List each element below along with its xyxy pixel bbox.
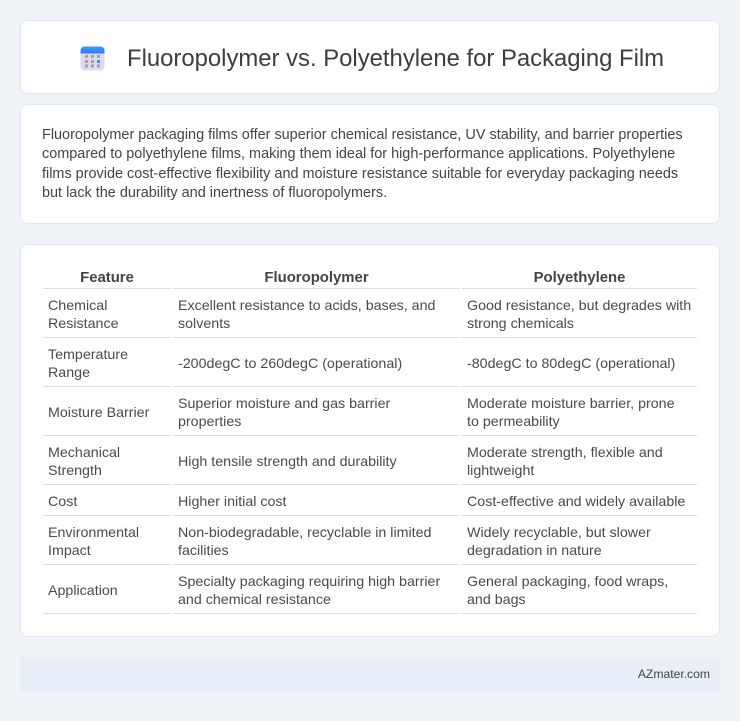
table card	[20, 244, 720, 637]
comparison table: Moderate strength, flexible and	[467, 445, 663, 461]
row: Temperature Range	[48, 347, 128, 381]
footer bar	[20, 657, 720, 691]
comparison table: Good resistance, but degrades with	[467, 298, 691, 314]
comparison table: Superior moisture and gas barrier	[178, 396, 390, 412]
row: Environmental Impact	[48, 525, 139, 559]
comparison table: Cost-effective and widely available	[467, 494, 685, 510]
comparison table: Moderate moisture barrier, prone	[467, 396, 675, 412]
row: Chemical Resistance	[48, 298, 118, 332]
comparison table: solvents	[178, 316, 230, 332]
comparison table: Higher initial cost	[178, 494, 287, 510]
comparison table: strong chemicals	[467, 316, 574, 332]
header: Fluoropolymer: Fluoropolymer	[264, 270, 369, 286]
row: Mechanical Strength: Strength	[48, 463, 102, 479]
row: Temperature Range: Range	[48, 365, 90, 381]
header: Polyethylene: Polyethylene	[534, 270, 625, 286]
row: Chemical Resistance: Chemical	[48, 298, 107, 314]
intro text: Fluoropolymer packaging films offer superior chemical resistance, UV stability, and barrier properties	[42, 126, 683, 142]
intro text: but lack the durability and inertness of fluoropolymers.	[42, 185, 387, 201]
comparison table: -200degC to 260degC (operational)	[178, 356, 402, 372]
comparison table: High tensile strength and durability	[178, 454, 397, 470]
comparison table: to permeability	[467, 414, 560, 430]
title card	[20, 20, 720, 94]
comparison table: and chemical resistance	[178, 592, 331, 608]
row: Environmental Impact: Impact	[48, 543, 91, 559]
row: Environmental Impact: Environmental	[48, 525, 139, 541]
comparison table: Specialty packaging requiring high barrier	[178, 574, 440, 590]
title: Fluoropolymer vs. Polyethylene for Packaging Film	[127, 45, 664, 72]
row: Temperature Range: Temperature	[48, 347, 128, 363]
row: Application: Application	[48, 583, 118, 599]
comparison table: Excellent resistance to acids, bases, and	[178, 298, 435, 314]
intro card	[20, 104, 720, 224]
comparison table: properties	[178, 414, 241, 430]
footer credit: AZmater.com	[638, 667, 710, 681]
icon: calendar	[80, 46, 104, 70]
row: Moisture Barrier: Moisture Barrier	[48, 405, 149, 421]
row: Cost: Cost	[48, 494, 77, 510]
row: Mechanical Strength: Mechanical	[48, 445, 120, 461]
comparison table: and bags	[467, 592, 526, 608]
header: Feature: Feature	[80, 270, 134, 286]
comparison table: General packaging, food wraps,	[467, 574, 668, 590]
intro text: films provide cost-effective flexibility and moisture resistance suitable for everyday packaging needs	[42, 166, 678, 182]
intro text: compared to polyethylene films, making them ideal for high-performance applications. Polyethylene	[42, 146, 675, 162]
comparison table: -80degC to 80degC (operational)	[467, 356, 675, 372]
intro text	[42, 126, 683, 201]
comparison table: Widely recyclable, but slower	[467, 525, 651, 541]
comparison table: facilities	[178, 543, 229, 559]
row: Mechanical Strength	[48, 445, 120, 479]
comparison table: degradation in nature	[467, 543, 602, 559]
row: Chemical Resistance: Resistance	[48, 316, 118, 332]
comparison table: lightweight	[467, 463, 534, 479]
comparison table: Non-biodegradable, recyclable in limited	[178, 525, 431, 541]
